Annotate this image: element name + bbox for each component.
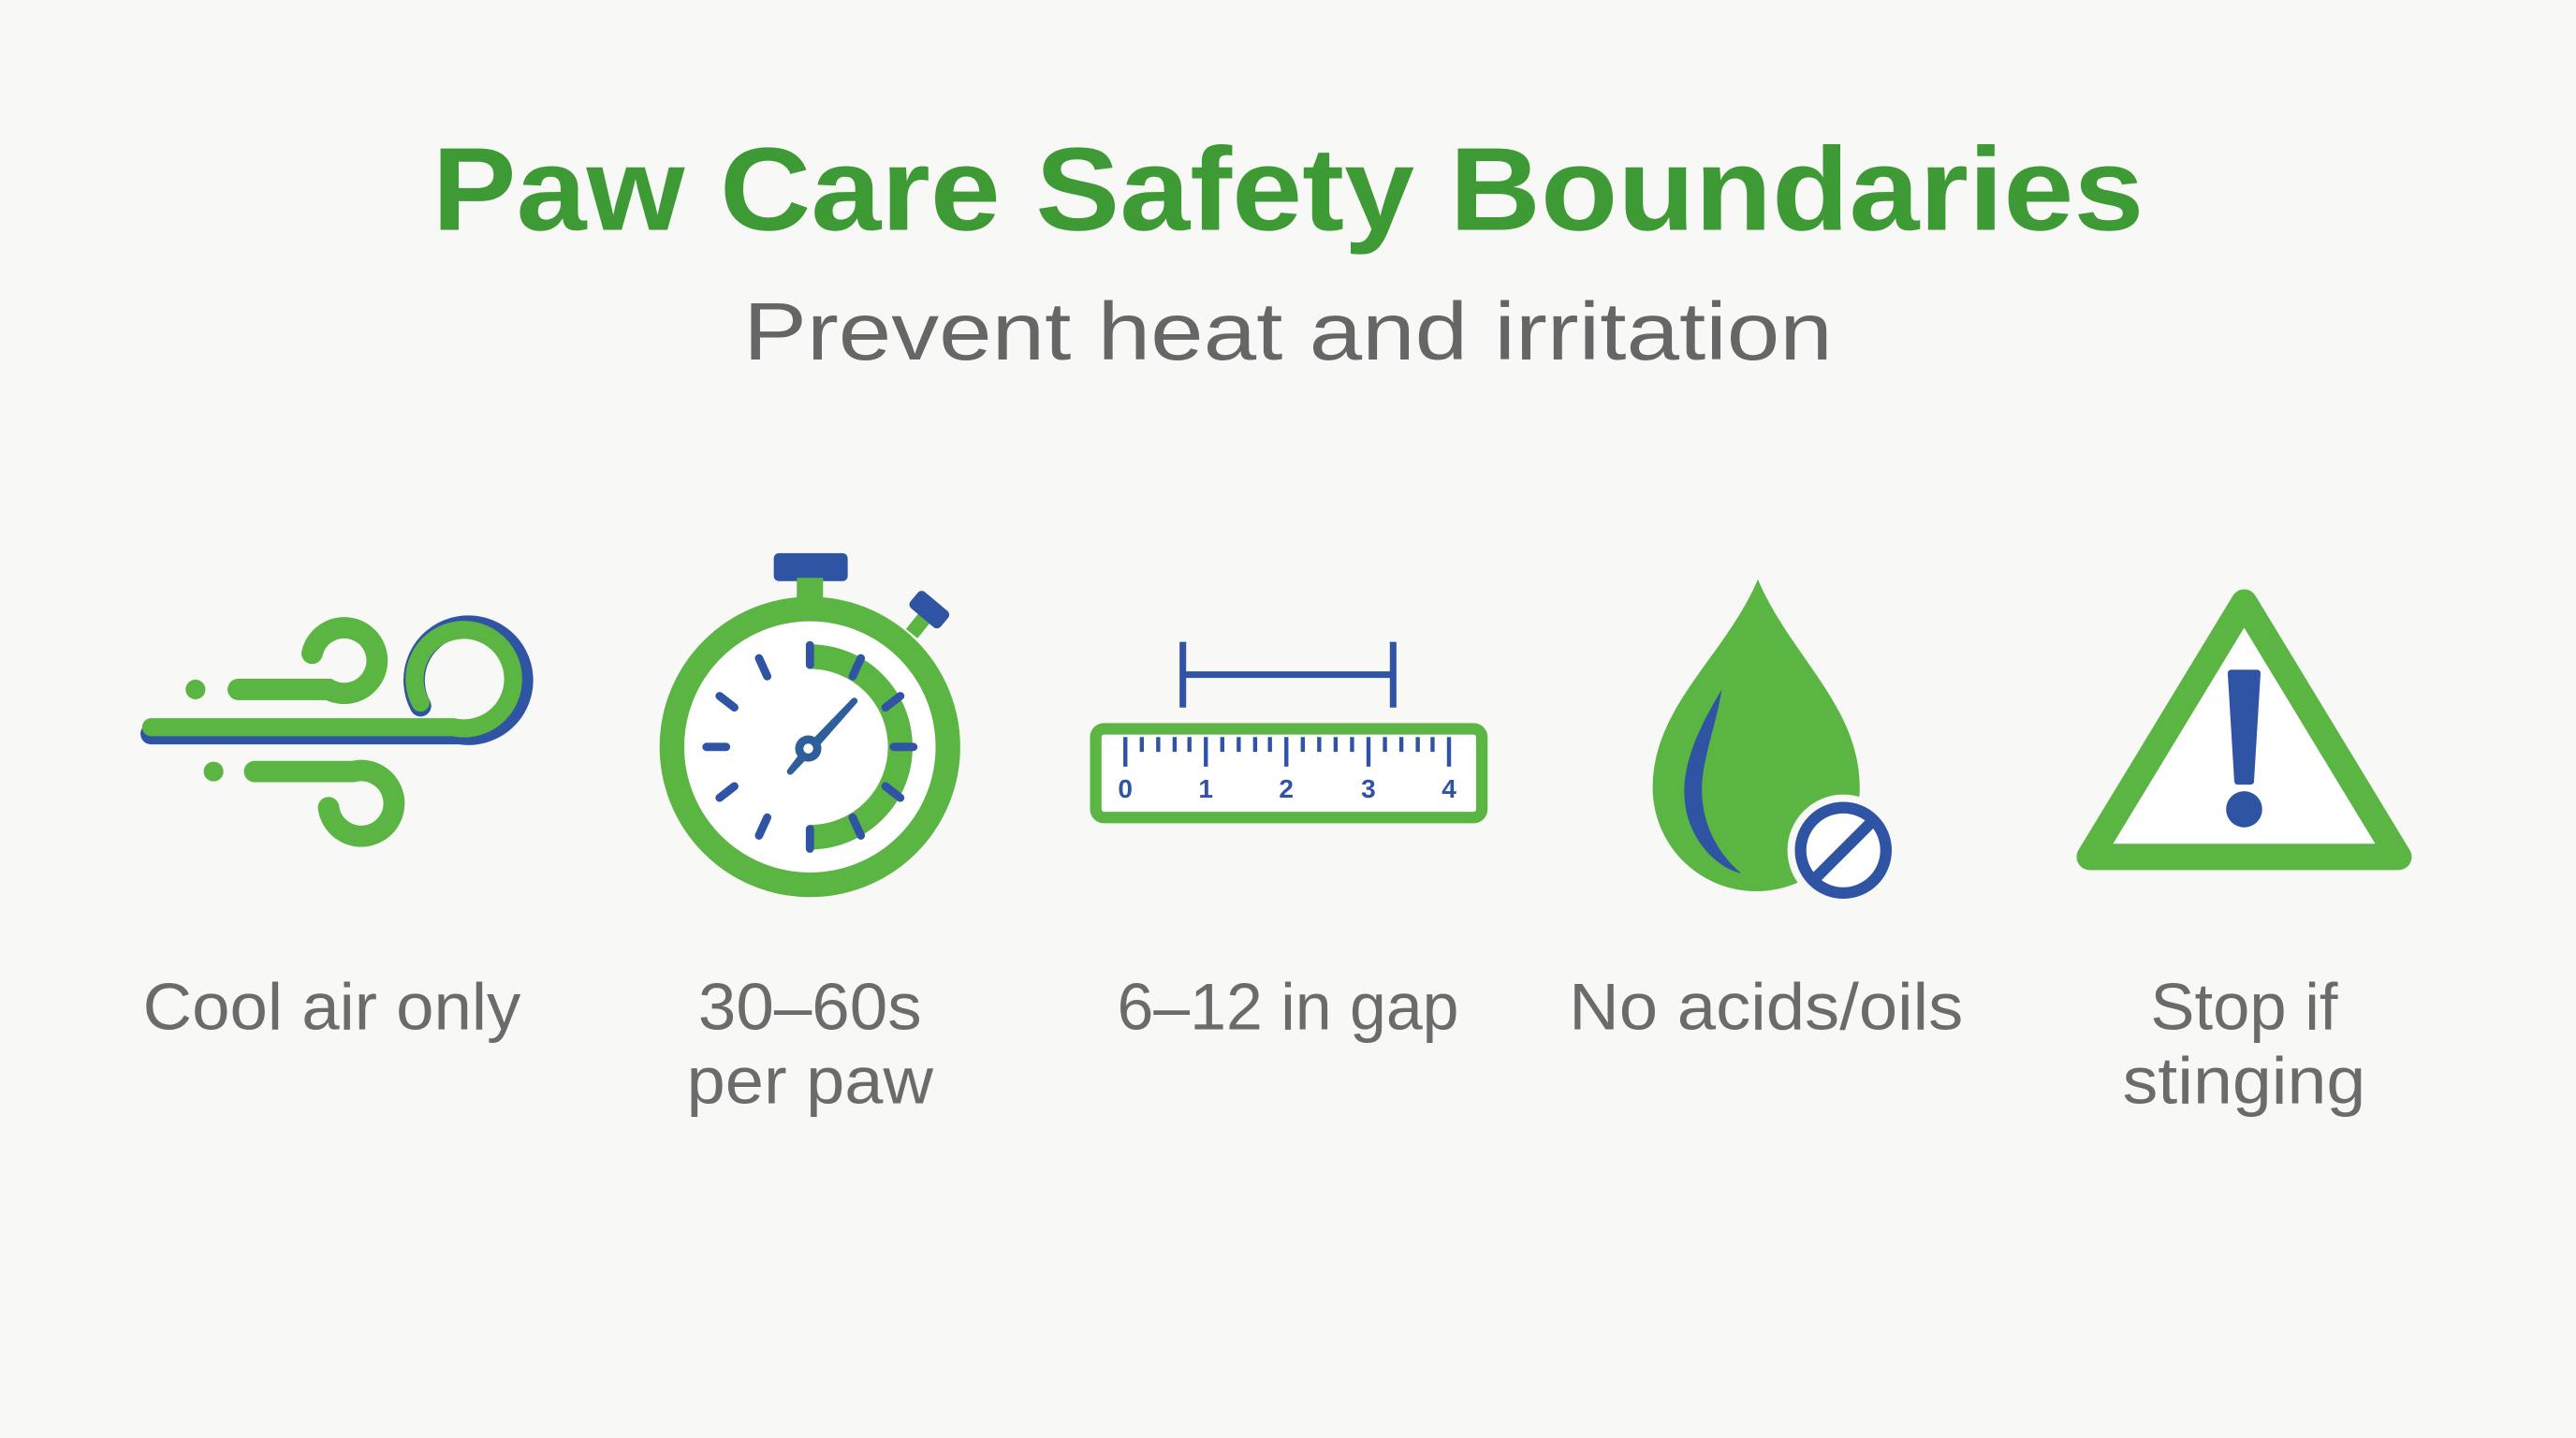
label: time: 30–60s [698,969,922,1043]
icon: wind [151,626,522,836]
labels [143,969,2365,1117]
subtitle: Prevent heat and irritation [743,286,1833,377]
title: Paw Care Safety Boundaries [432,124,2144,255]
icon: ruler: 4 [1442,774,1456,803]
icon: drop with no sign [1653,580,1899,906]
label: cool air: Cool air only [143,969,520,1043]
label: acids: No acids/oils [1569,969,1963,1043]
icon: ruler: 0 [1118,774,1133,803]
icon: ruler: 2 [1279,774,1294,803]
label: gap: 6–12 in gap [1117,969,1459,1043]
icon: stopwatch [672,553,951,885]
icon: ruler [1096,642,1482,817]
label: time: per paw [687,1043,933,1117]
icon: warning triangle [2089,603,2398,857]
icon: ruler: 3 [1361,774,1376,803]
icon: ruler: 1 [1198,774,1213,803]
label: stop: Stop if [2150,969,2338,1043]
label: stop: stinging [2123,1043,2365,1117]
